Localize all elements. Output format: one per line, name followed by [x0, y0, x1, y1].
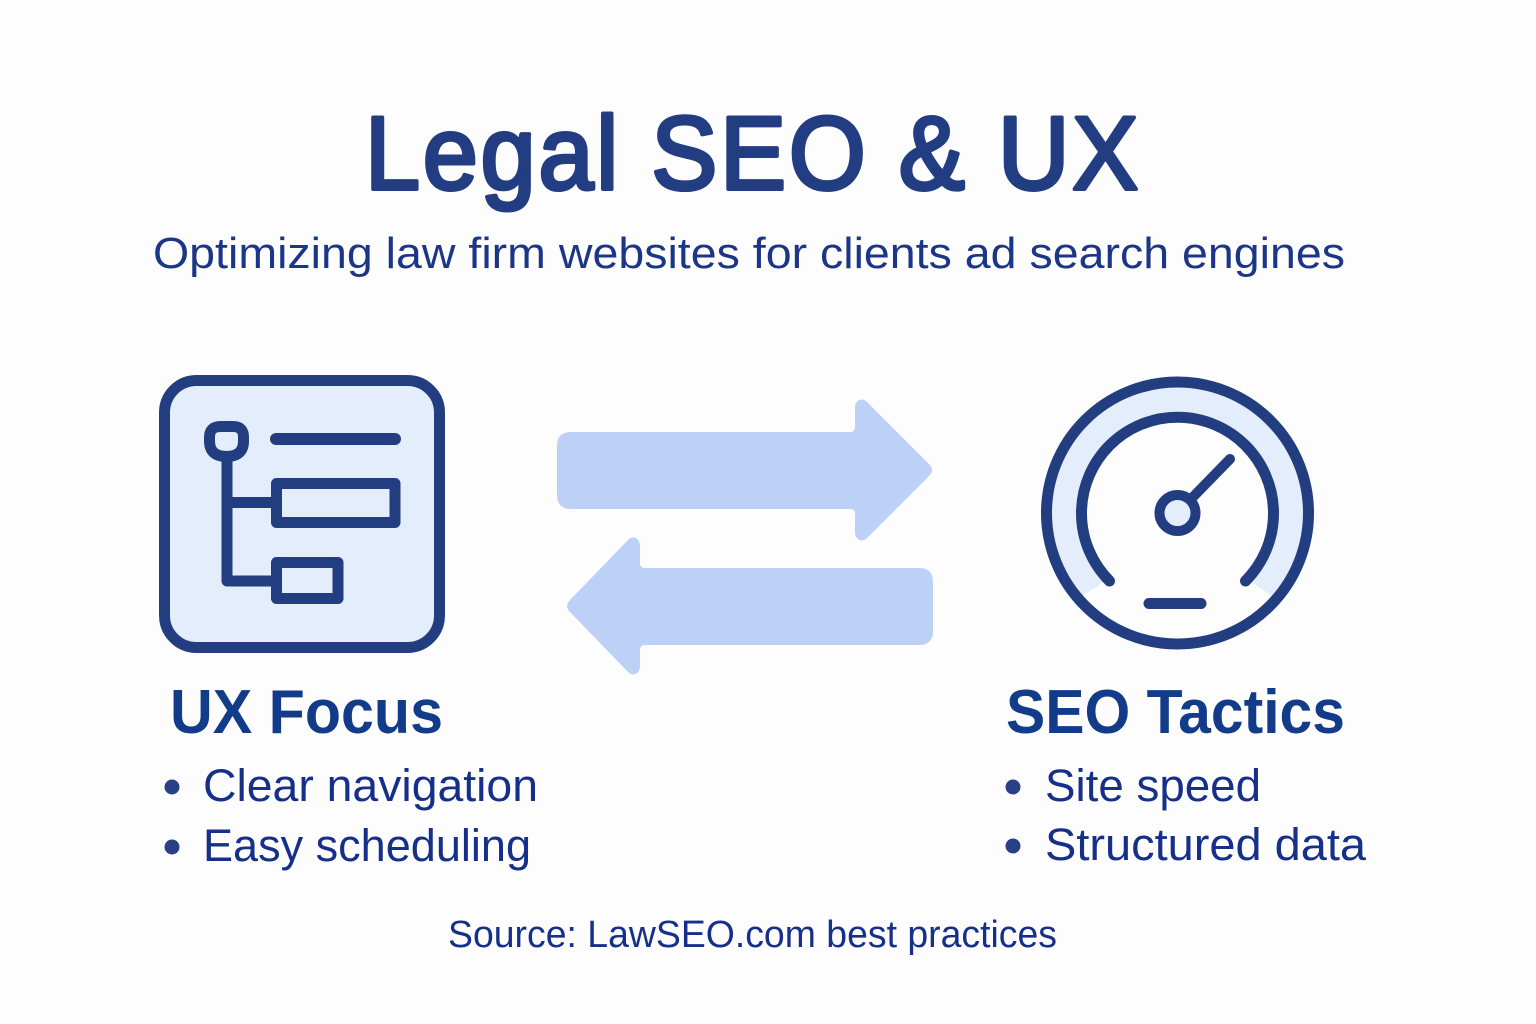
- list: UX Focus items: Easy scheduling: [203, 820, 531, 871]
- list: UX Focus items: Clear navigation: [203, 760, 538, 811]
- list: UX Focus items: [164, 760, 538, 871]
- list: SEO Tactics items: [1006, 760, 1367, 870]
- list: SEO Tactics items: Site speed: [1045, 760, 1261, 811]
- heading: UX Focus: UX Focus: [170, 678, 443, 747]
- arrow: left: [567, 538, 933, 674]
- arrow: right: [557, 400, 932, 540]
- heading: SEO Tactics: SEO Tactics: [1006, 678, 1345, 747]
- icon: UX site structure: [164, 380, 440, 648]
- list: SEO Tactics items: Structured data: [1045, 819, 1367, 870]
- icon: speed gauge: [1046, 382, 1308, 644]
- title: Legal SEO & UX: [365, 96, 1141, 212]
- subtitle: Optimizing law firm websites for clients ad search engines: [153, 229, 1345, 278]
- source note: Source: LawSEO.com best practices: [448, 914, 1057, 956]
